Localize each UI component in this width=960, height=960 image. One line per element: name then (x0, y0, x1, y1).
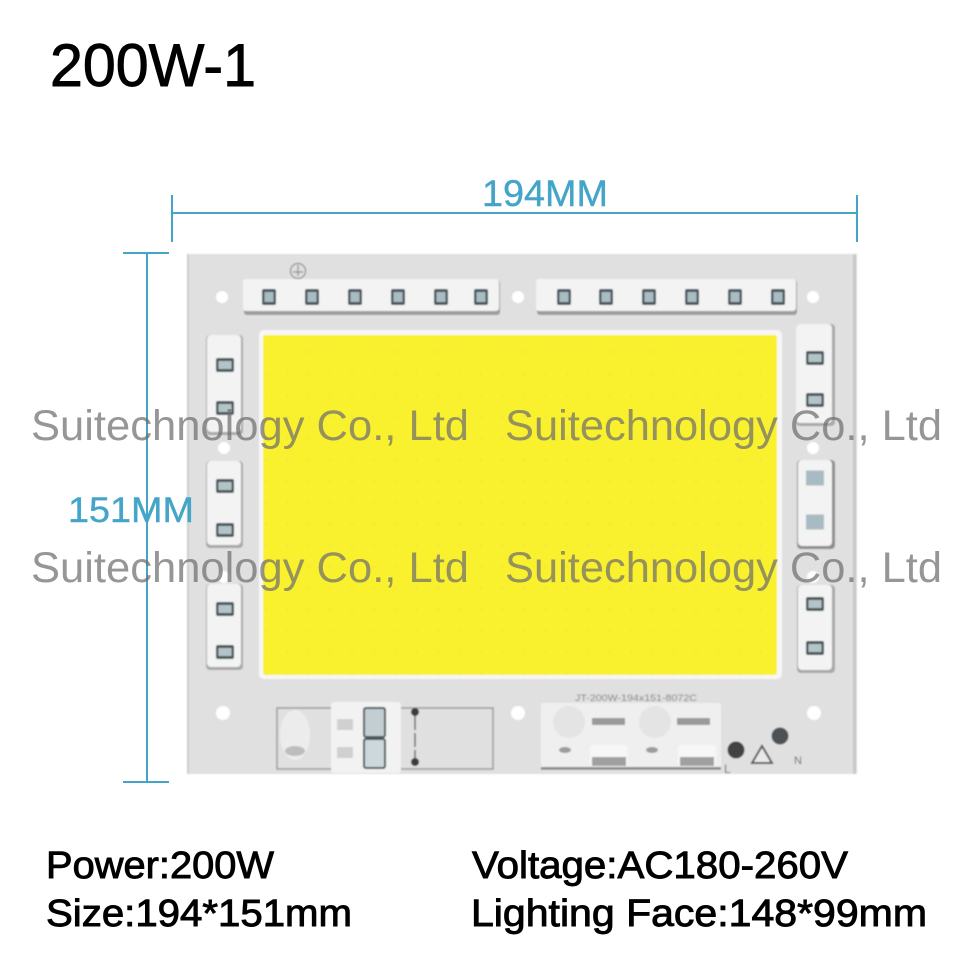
left driver component block (277, 702, 493, 773)
specifications text (46, 845, 927, 935)
terminals and warning mark (724, 728, 802, 776)
watermarks: Suitechnology Co., Ltd (505, 544, 942, 592)
LED board (187, 254, 857, 776)
top LED strip right (536, 279, 797, 315)
dimension: width 194MM: 194MM (482, 173, 608, 214)
left LED modules (206, 335, 243, 670)
watermarks: Suitechnology Co., Ltd (31, 544, 469, 592)
top LED strip left (243, 279, 500, 315)
watermarks (31, 402, 942, 592)
size: Size:194*151mm (46, 893, 352, 935)
lighting face: Lighting Face:148*99mm (471, 893, 927, 935)
yellow lighting face (259, 330, 782, 679)
board marking text: JT-200W-194x151-8072C (575, 693, 698, 703)
terminals and warning mark: N (794, 755, 802, 767)
power: Power:200W (46, 845, 274, 887)
title: 200W-1 (50, 32, 256, 99)
right driver component block (541, 703, 721, 771)
dimension: height 151MM: 151MM (68, 491, 194, 530)
terminals and warning mark: L (724, 762, 731, 776)
icon: ground mark (290, 264, 306, 278)
watermarks: Suitechnology Co., Ltd (505, 402, 942, 450)
mounting holes (216, 291, 821, 720)
right LED modules (796, 324, 835, 673)
voltage: Voltage:AC180-260V (472, 845, 849, 887)
watermarks: Suitechnology Co., Ltd (31, 402, 469, 450)
